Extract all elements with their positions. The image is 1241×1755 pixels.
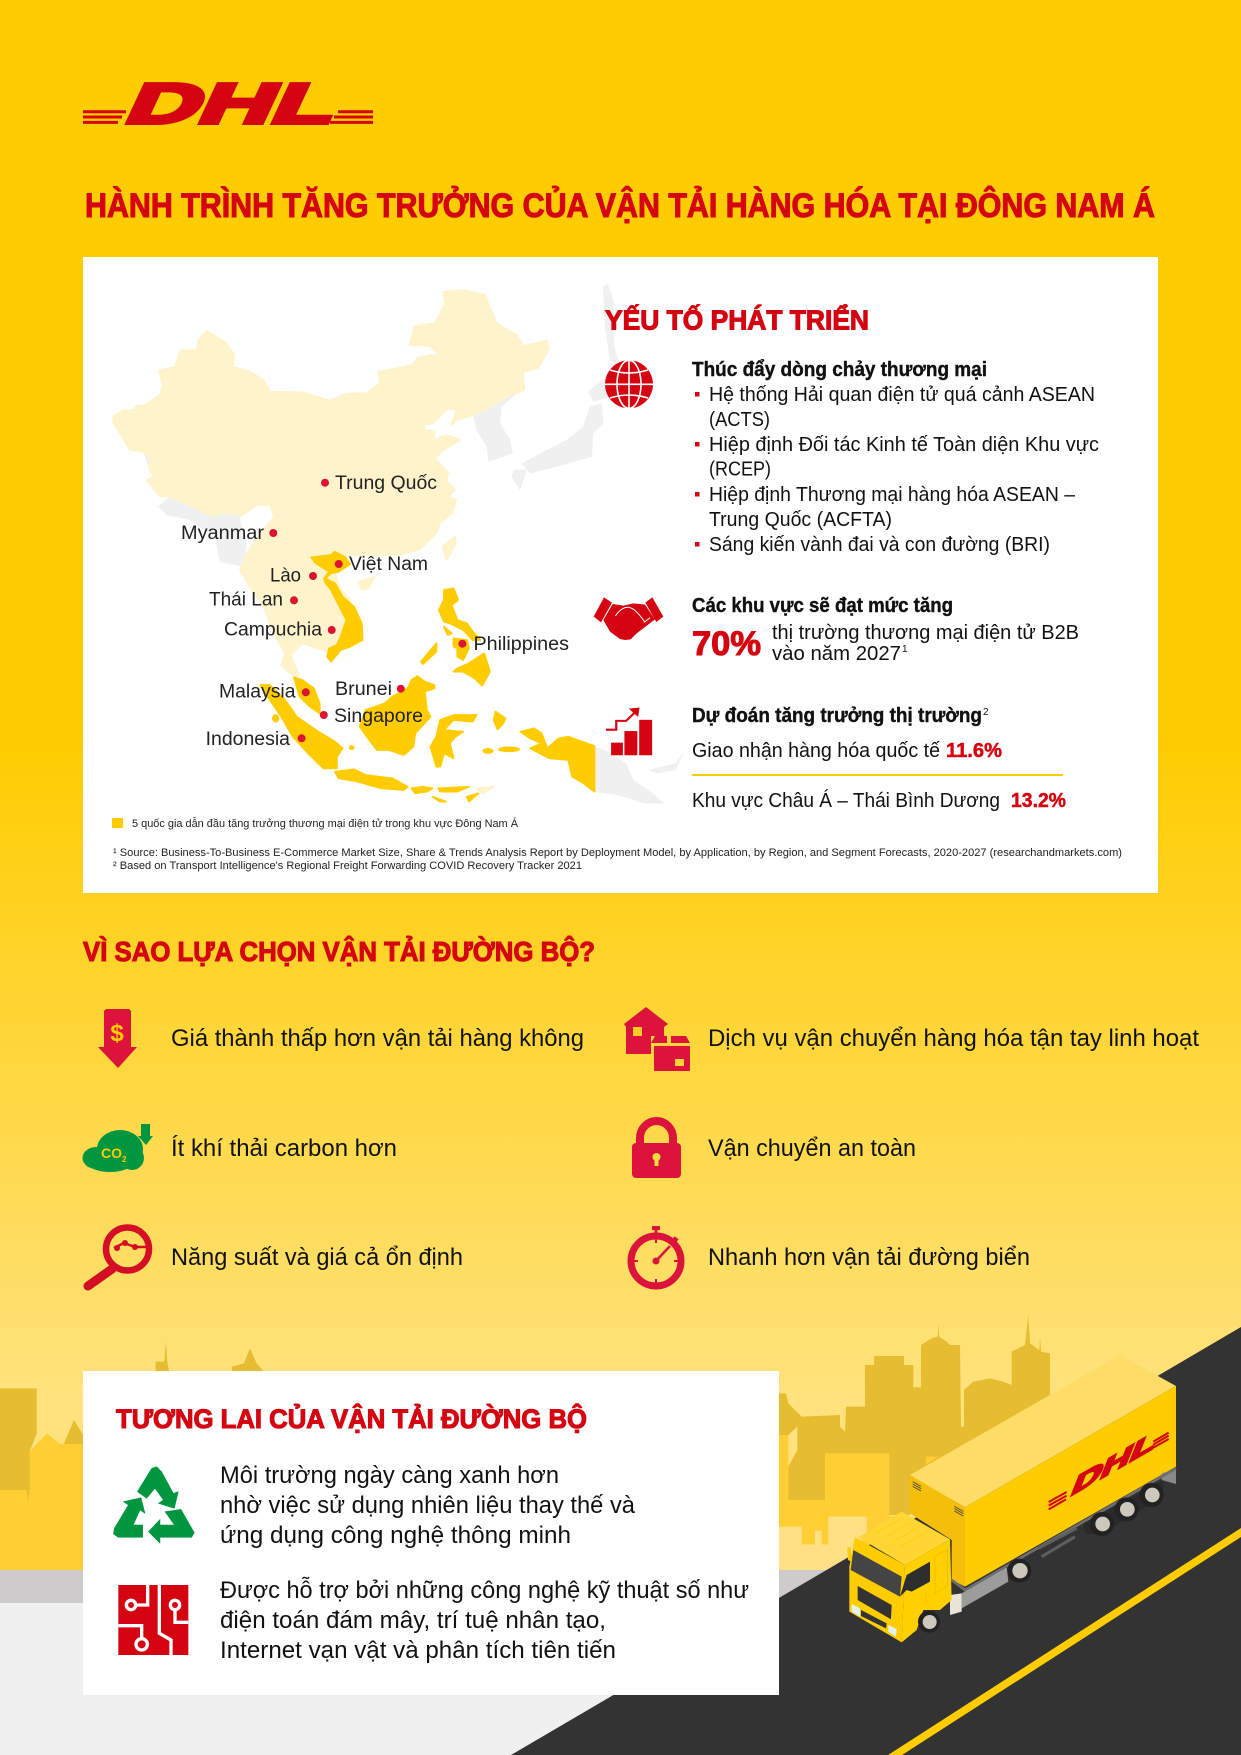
icon: stopwatch: [631, 1226, 681, 1286]
footnotes: [113, 847, 1122, 872]
icon: recycling: [113, 1467, 194, 1543]
country labels: Thái Lan: [209, 590, 283, 611]
benefit: safe transport: Vận chuyển an toàn: [708, 1135, 916, 1162]
country labels: Myanmar: [181, 523, 265, 544]
e-commerce stat: [692, 595, 1079, 665]
map of Asia: [113, 283, 683, 803]
icon: price down arrow: $: [110, 1020, 124, 1047]
country labels: Việt Nam: [349, 554, 428, 575]
trade flow block: Hiệp định Thương mại hàng hóa ASEAN –: [709, 484, 1076, 506]
text: greener environment: ứng dụng công nghệ thông minh: [220, 1522, 571, 1549]
text: greener environment: [220, 1462, 635, 1549]
country labels: Brunei: [335, 679, 392, 700]
map legend: 5 quốc gia dẫn đầu tăng trưởng thương mại điện tử trong khu vực Đông Nam Á: [132, 817, 519, 830]
market forecast: Dự đoán tăng trưởng thị trường: [692, 705, 982, 727]
country labels: [181, 473, 569, 750]
market forecast: 11.6%: [946, 740, 1002, 762]
benefit: door to door: Dịch vụ vận chuyển hàng hóa tận tay linh hoạt: [708, 1025, 1199, 1052]
market forecast: 13.2%: [1011, 790, 1066, 812]
yellow: Southeast Asia leaders: [260, 552, 594, 802]
trade flow block: [692, 359, 1099, 556]
country labels: Campuchia: [224, 620, 322, 641]
country labels: Malaysia: [219, 682, 296, 703]
text: digital technology: Được hỗ trợ bởi những công nghệ kỹ thuật số như: [220, 1577, 749, 1604]
trade flow block: Sáng kiến vành đai và con đường (BRI): [709, 534, 1050, 556]
trade flow block: Hệ thống Hải quan điện tử quá cảnh ASEAN: [709, 384, 1095, 406]
icon: magnifier: [88, 1228, 149, 1286]
DHL truck: [847, 1355, 1176, 1642]
market forecast: 2: [983, 707, 989, 718]
country labels: Trung Quốc: [335, 473, 437, 494]
benefit: stable productivity: [88, 1228, 463, 1286]
trade flow block: (RCEP): [709, 459, 771, 481]
icon: growth chart: [606, 708, 652, 755]
heading: TƯƠNG LAI CỦA VẬN TẢI ĐƯỜNG BỘ: [116, 1402, 587, 1434]
icon: house and parcel: [624, 1007, 690, 1071]
DHL logo: DHL: [116, 72, 353, 135]
skyline: right city: [779, 1315, 1050, 1570]
trade flow block: (ACTS): [709, 409, 770, 431]
e-commerce stat: 1: [902, 644, 908, 655]
icon: CO2 cloud: CO: [101, 1145, 122, 1161]
trade flow block: Thúc đẩy dòng chảy thương mại: [692, 359, 987, 381]
heading: why road freight: VÌ SAO LỰA CHỌN VẬN TẢI ĐƯỜNG BỘ?: [83, 935, 595, 967]
country labels: Philippines: [474, 634, 569, 655]
footnotes: ¹ Source: Business-To-Business E-Commerce Market Size, Share & Trends Analysis Report by Deployment Model, by Application, by Region, and Segment Forecasts, 2020-2027 (researchandmarkets.com): [113, 847, 1122, 859]
benefit: door to door: [624, 1007, 1199, 1071]
benefit: lower cost: [98, 1009, 584, 1068]
text: digital technology: [220, 1577, 749, 1664]
benefit: faster than sea: Nhanh hơn vận tải đường biển: [708, 1244, 1030, 1271]
panel: growth factors and map: [83, 257, 1158, 893]
road marking: [888, 1528, 1241, 1755]
truck logo: DHL: [1067, 1422, 1163, 1503]
icon: circuit: [118, 1585, 188, 1655]
benefit: lower carbon: [82, 1124, 397, 1172]
trade flow block: Trung Quốc (ACFTA): [709, 509, 892, 531]
country labels: Lào: [270, 566, 301, 587]
text: greener environment: Môi trường ngày càng xanh hơn: [220, 1462, 559, 1489]
e-commerce stat: thị trường thương mại điện tử B2B: [772, 622, 1079, 644]
benefit: faster than sea: [631, 1226, 1030, 1286]
text: greener environment: nhờ việc sử dụng nhiên liệu thay thế và: [220, 1492, 635, 1519]
icon: handshake: [594, 597, 663, 640]
chassis and wheels: [950, 1468, 1176, 1615]
cream: China and mainland: [113, 290, 549, 793]
grey neighbouring countries: [143, 283, 683, 803]
cab: [847, 1512, 952, 1642]
benefit: safe transport: [632, 1121, 916, 1178]
benefit: stable productivity: Năng suất và giá cả ổn định: [171, 1244, 463, 1271]
country labels: Indonesia: [206, 729, 290, 750]
e-commerce stat: vào năm 2027: [772, 643, 901, 665]
market forecast: Giao nhận hàng hóa quốc tế: [692, 740, 940, 762]
trade flow block: Hiệp định Đối tác Kinh tế Toàn diện Khu vực: [709, 434, 1099, 456]
container: [910, 1355, 1176, 1587]
DHL logo: [83, 72, 373, 135]
icon: CO2 cloud: [82, 1124, 153, 1172]
e-commerce stat: 70%: [692, 625, 761, 663]
heading: growth factors: YẾU TỐ PHÁT TRIỂN: [605, 304, 869, 336]
road: [511, 1327, 1241, 1755]
market forecast: Khu vực Châu Á – Thái Bình Dương: [692, 789, 1000, 812]
text: digital technology: điện toán đám mây, trí tuệ nhân tạo,: [220, 1607, 606, 1634]
icon: padlock: [632, 1121, 681, 1178]
benefit: lower cost: Giá thành thấp hơn vận tải hàng không: [171, 1025, 584, 1052]
e-commerce stat: Các khu vực sẽ đạt mức tăng: [692, 595, 953, 617]
panel: future of road freight: [83, 1371, 779, 1695]
skyline: left city: [0, 1342, 265, 1570]
country labels: Singapore: [334, 706, 423, 727]
icon: globe: [605, 360, 653, 408]
market forecast: [692, 705, 1066, 812]
truck logo: [1049, 1422, 1169, 1509]
icon: CO2 cloud: 2: [122, 1155, 127, 1164]
benefit: lower carbon: Ít khí thải carbon hơn: [171, 1135, 397, 1162]
text: digital technology: Internet vạn vật và phân tích tiên tiến: [220, 1637, 616, 1664]
icon: price down arrow: [98, 1009, 137, 1068]
ground: [0, 1570, 1241, 1755]
footnotes: ² Based on Transport Intelligence's Regional Freight Forwarding COVID Recovery Tracker 2021: [113, 860, 582, 872]
